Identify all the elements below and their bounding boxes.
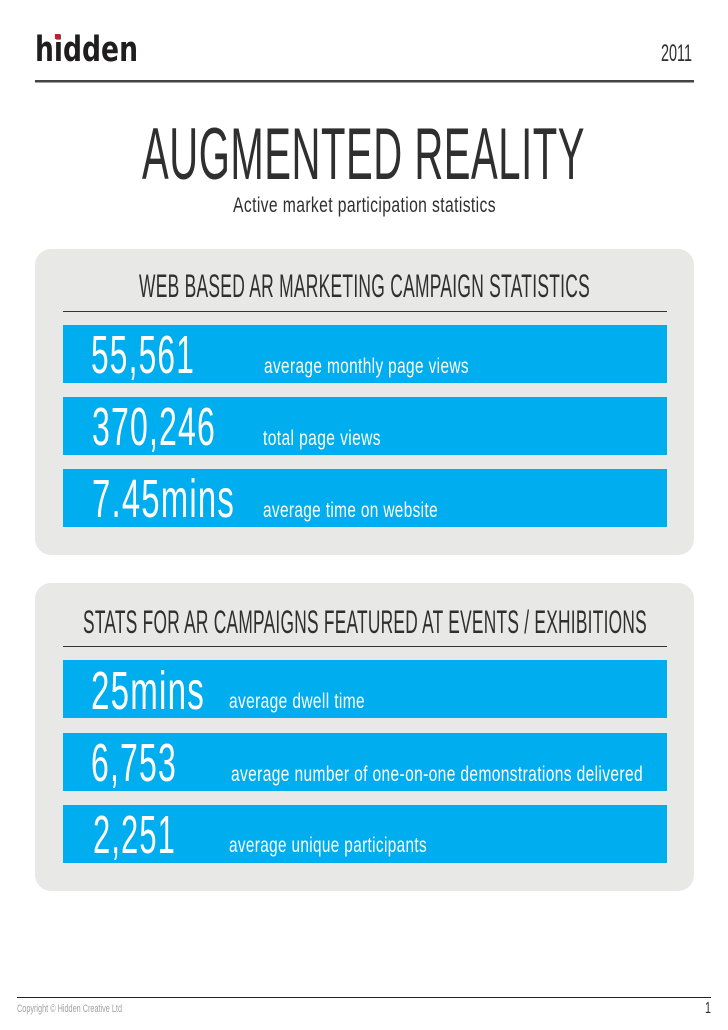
copyright: Copyright © Hidden Creative Ltd (17, 1003, 122, 1015)
stat: monthly page views (63, 325, 667, 385)
stat: total page views: total page views (263, 427, 381, 450)
stat: dwell time: average dwell time (229, 690, 365, 713)
stat: total page views (63, 397, 667, 457)
panel: web based AR marketing campaign statistics (35, 249, 694, 555)
stat: demonstrations (63, 733, 667, 793)
stat: total page views: 370,246 (92, 397, 216, 457)
stat: monthly page views: 55,561 (91, 325, 195, 385)
stat: time on website: average time on website (263, 499, 438, 522)
stat: unique participants: 2,251 (93, 805, 176, 865)
stat: unique participants: average unique participants (229, 834, 427, 857)
stat: time on website: 7.45mins (92, 469, 235, 529)
page number: 1 (705, 1000, 711, 1017)
stat: dwell time: 25mins (91, 661, 205, 721)
header (35, 30, 694, 82)
year: 2011 (661, 40, 692, 67)
footer (17, 997, 711, 1017)
stat: monthly page views: average monthly page views (264, 355, 469, 378)
panel: stats for AR campaigns at events (35, 583, 694, 891)
stat: dwell time (63, 660, 667, 721)
stat: demonstrations: 6,753 (91, 733, 177, 793)
subtitle: Active market participation statistics (233, 194, 496, 217)
stat: time on website (63, 469, 667, 529)
stat: unique participants (63, 805, 667, 865)
logo: hidden: hidden (35, 30, 138, 70)
